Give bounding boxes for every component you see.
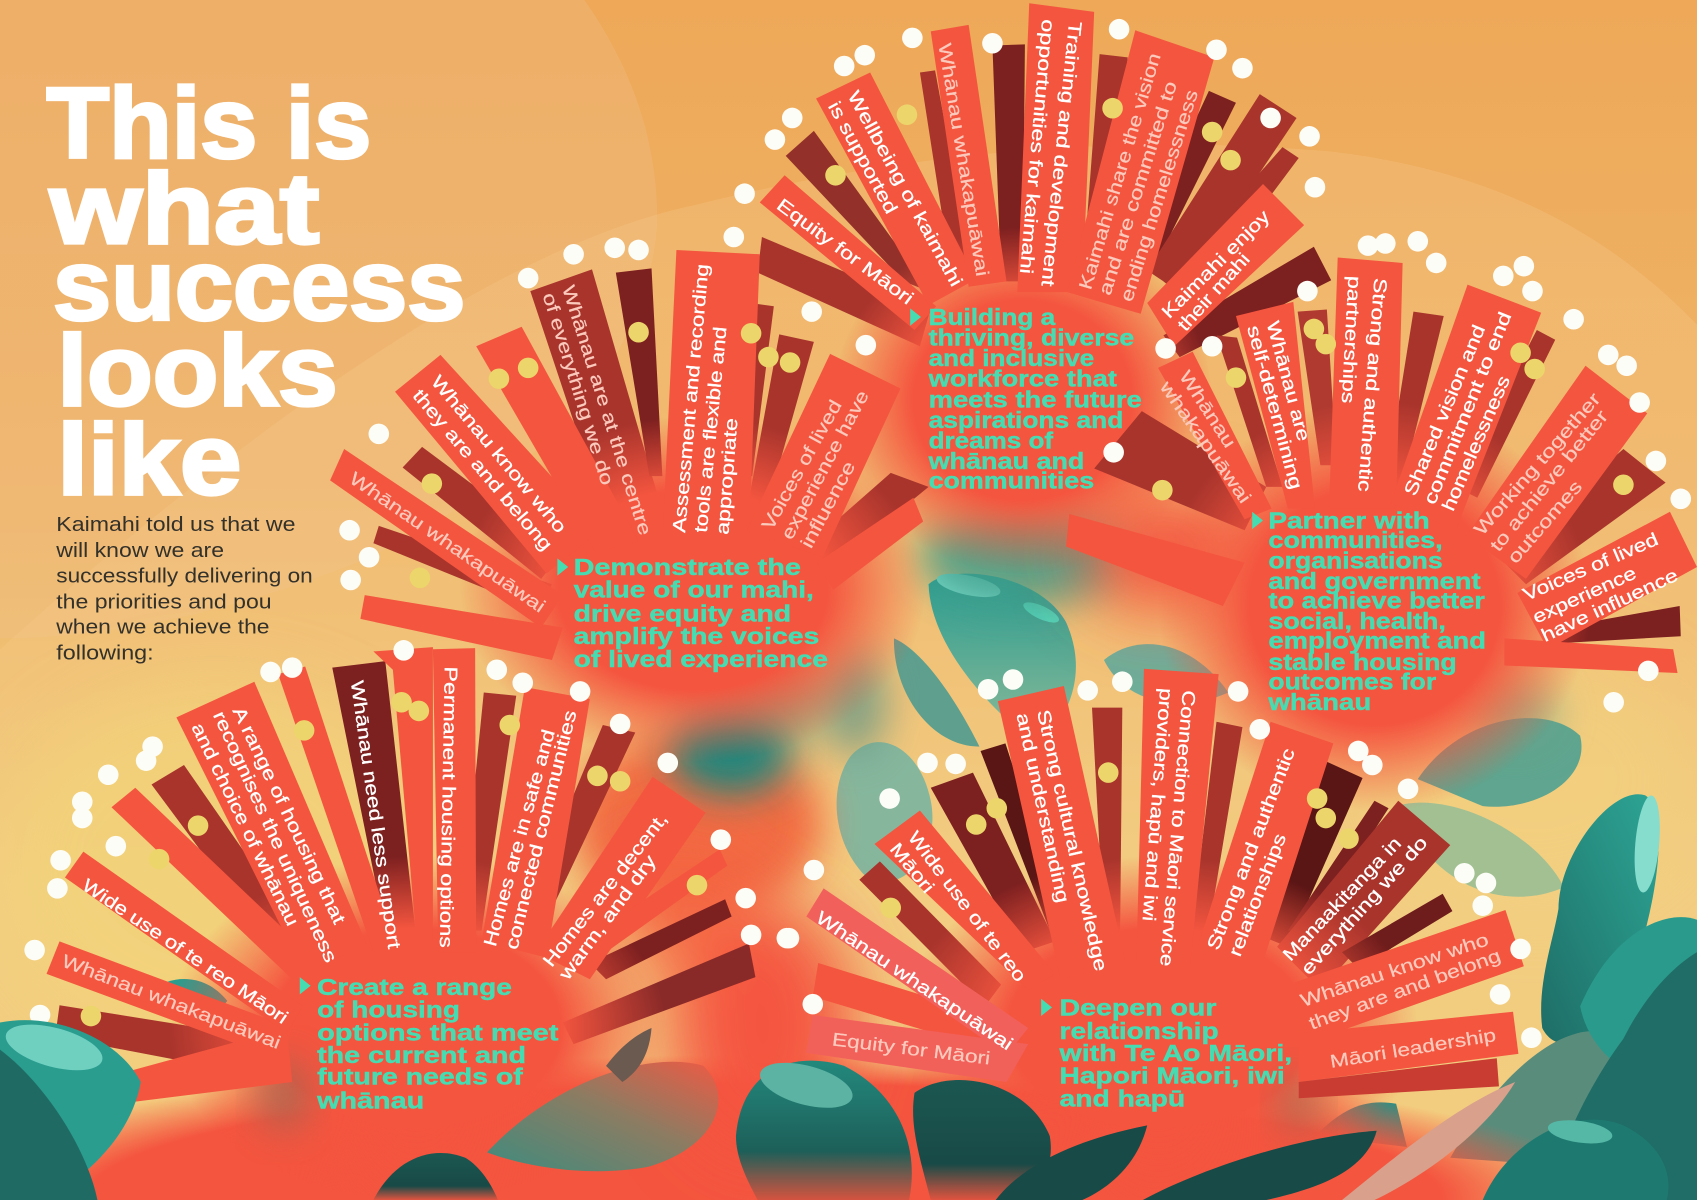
label text: Training and development (1038, 21, 1086, 287)
label text: Whānau know who (1298, 928, 1491, 1011)
label text: opportunities for kaimahi (1016, 19, 1059, 275)
label text (346, 263, 873, 617)
label text: homelessness (1437, 372, 1514, 514)
label text: tools are flexible and (690, 326, 730, 533)
label text: Kaimahi share the vision (1074, 51, 1165, 292)
heading: of housing (317, 997, 460, 1023)
shaded edge of centre (260, 1060, 307, 1130)
label text: they are and belong (1306, 945, 1503, 1033)
label text: Whānau whakapuāwai (59, 950, 284, 1053)
heading: dreams of (929, 427, 1053, 453)
heading: and government (1268, 568, 1481, 594)
dark stamens (859, 708, 1452, 1006)
heading: Building a (929, 304, 1056, 330)
dark stamens (373, 268, 929, 611)
label text: appropriate (711, 417, 742, 535)
heading: drive equity and (574, 601, 791, 627)
heading: and inclusive (929, 345, 1094, 371)
stamen dots (1114, 241, 1681, 702)
heading: communities (929, 467, 1094, 493)
title: like (57, 404, 241, 516)
intro text: when we achieve the (55, 617, 269, 639)
label text: Whānau are (1263, 319, 1315, 443)
label text: and understanding (1012, 711, 1074, 905)
heading: whānau (316, 1087, 424, 1113)
centre glow (833, 227, 1212, 573)
dark stamens (758, 44, 1331, 357)
leaves behind the flowers (152, 509, 1697, 1200)
heading: of lived experience (574, 646, 828, 672)
label text: experience (1529, 562, 1639, 627)
label text: commitment to end (1419, 309, 1515, 507)
stamen dots (350, 248, 866, 580)
label text: Whānau need less support (347, 679, 405, 950)
label text: Whānau whakapuāwai (346, 467, 549, 617)
label text: Working together (1469, 388, 1605, 539)
dark stamens (55, 661, 755, 1082)
heading: Create a range (317, 974, 512, 1000)
intro text (55, 514, 313, 665)
label text: to achieve better (1485, 406, 1612, 555)
label text: and choice of whānau (188, 719, 303, 929)
label text: relationships (1224, 830, 1290, 959)
label text: influence (796, 457, 859, 551)
flower: Deepen our relationship (789, 669, 1531, 1200)
flower: Partner with communities (1066, 241, 1697, 812)
label text: Homes are in safe and (479, 727, 559, 949)
title (47, 67, 465, 516)
heading: to achieve better (1268, 588, 1485, 614)
label bars (47, 647, 727, 1110)
centre glow (460, 417, 925, 763)
heading: social, health, (1268, 608, 1446, 634)
flower: Building a thriving workforce (734, 3, 1331, 573)
label text: Connection to Māori service (1156, 689, 1200, 967)
label text: Wide use of te reo Māori (79, 874, 292, 1028)
heading: with Te Ao Māori, (1058, 1040, 1292, 1066)
heading: aspirations and (929, 407, 1123, 433)
centre glow (1158, 400, 1591, 812)
label text: Wide use of te reo (904, 827, 1031, 986)
label text: Permanent housing options (436, 666, 462, 948)
label text: everything we do (1296, 832, 1431, 979)
heading: Hapori Māori, iwi (1060, 1063, 1285, 1089)
label text: and are committed to (1094, 79, 1181, 297)
heading: outcomes for (1268, 669, 1436, 695)
label text: providers, hapū and iwi (1139, 687, 1177, 922)
label text: whakapuāwai (1155, 376, 1256, 507)
label text: recognises the uniqueness (209, 708, 342, 965)
label text: Kaimahi enjoy (1157, 205, 1274, 322)
heading: stable housing (1268, 649, 1457, 675)
lower red wash (0, 492, 1697, 1200)
label text: Voices of lived (1520, 528, 1661, 605)
label text: experience have (776, 387, 873, 543)
label bars (1066, 258, 1697, 673)
heading (300, 974, 559, 1113)
label text: connected communities (501, 708, 580, 952)
heading (1041, 994, 1292, 1111)
label text: outcomes (1503, 476, 1586, 567)
heading (1252, 507, 1486, 715)
label text: Whānau know who (427, 371, 571, 537)
stamen dots (35, 650, 787, 1016)
heading: employment and (1268, 628, 1486, 654)
label text: of everything we do (539, 290, 618, 487)
heading: options that meet (317, 1019, 559, 1045)
label text: Whānau are at the centre (558, 283, 656, 538)
heading: relationship (1060, 1018, 1219, 1044)
heading: Partner with (1268, 507, 1430, 533)
label bars (806, 669, 1524, 1098)
heading: the current and (317, 1042, 526, 1068)
centre glow (898, 856, 1418, 1200)
label text: Whānau whakapuāwai (812, 907, 1017, 1054)
heading: workforce that (927, 366, 1117, 392)
heading (557, 554, 828, 672)
title: success (53, 230, 465, 342)
label text: Whānau (1175, 367, 1241, 451)
intro text: will know we are (55, 540, 224, 562)
stamen dots (789, 680, 1531, 1038)
label text: Wellbeing of kaimahi (844, 87, 967, 290)
heading: and hapū (1060, 1085, 1185, 1111)
intro text: the priorities and pou (56, 592, 272, 614)
stamen dots (734, 29, 1315, 237)
heading: meets the future (929, 386, 1142, 412)
label text: Homes are decent, (538, 808, 671, 971)
label text: Assessment and recording (668, 263, 713, 533)
label text: Strong and authentic (1202, 745, 1299, 953)
label bars (330, 250, 923, 660)
label text: have influence (1538, 564, 1681, 646)
label text: Equity for Māori (831, 1028, 991, 1069)
label text: Shared vision and (1399, 322, 1489, 499)
label text: Equity for Māori (773, 194, 918, 309)
label text: ending homelessness (1116, 87, 1202, 304)
label text: A range of housing that (229, 703, 350, 927)
title: This is (47, 67, 371, 179)
heading (910, 304, 1142, 493)
label text: Voices of lived (757, 396, 846, 533)
heading: Demonstrate the (574, 554, 801, 580)
foreground leaves (0, 1016, 1668, 1200)
label text (1155, 275, 1681, 646)
heading: thriving, diverse (929, 325, 1134, 351)
flower: Create a range of housing (35, 647, 787, 1200)
heading: whānau and (927, 448, 1084, 474)
heading: whānau (1267, 689, 1371, 715)
label text: self-determining (1243, 323, 1307, 491)
flower: Demonstrate the value (330, 248, 929, 763)
label text (59, 666, 671, 1053)
heading: organisations (1268, 548, 1443, 574)
title: looks (57, 315, 338, 427)
heading: communities, (1268, 527, 1443, 553)
label text: Māori (886, 838, 939, 897)
heading: value of our mahi, (574, 577, 814, 603)
dark stamens (1094, 309, 1681, 644)
label text: Strong and authentic (1354, 277, 1391, 493)
shaded edge of centre (1279, 1076, 1318, 1132)
title: what (49, 153, 319, 265)
label text: warm, and dry (554, 850, 661, 984)
heading: amplify the voices (574, 623, 819, 649)
heading: Deepen our (1060, 994, 1216, 1020)
label text: Strong cultural knowledge (1033, 708, 1112, 973)
centre glow (168, 856, 666, 1200)
label text: Whānau whakapuāwai (934, 42, 993, 278)
label text: their mahi (1173, 248, 1254, 335)
label text: Manaakitanga in (1278, 833, 1405, 965)
label text: they are and belong (409, 385, 557, 554)
label text: partnerships (1338, 275, 1365, 404)
heading: future needs of (317, 1064, 523, 1090)
label bars (760, 3, 1304, 346)
intro text: following: (56, 643, 154, 665)
intro text: Kaimahi told us that we (56, 514, 295, 536)
label text: is supported (824, 98, 902, 217)
label text (812, 687, 1503, 1072)
label text: Māori leadership (1328, 1024, 1497, 1072)
label text (773, 19, 1274, 335)
intro text: successfully delivering on (56, 566, 313, 588)
